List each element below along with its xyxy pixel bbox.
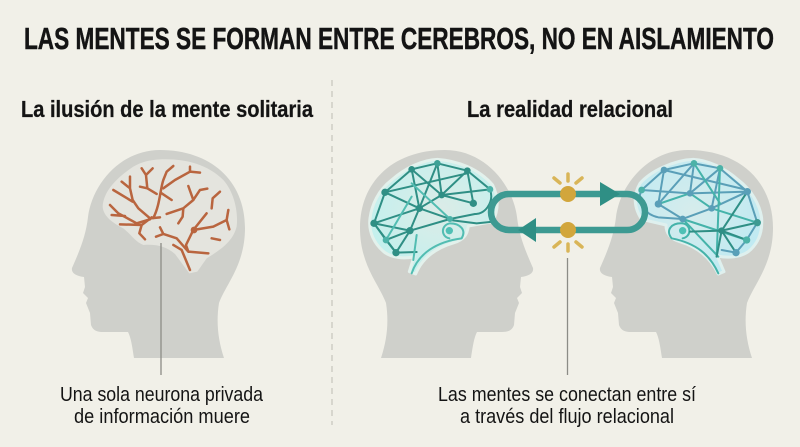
leader line: left: [160, 243, 162, 375]
caption: right: [438, 383, 696, 428]
icon: bottom spark node: [554, 222, 582, 251]
panel: relational reality: [360, 150, 773, 428]
panel: solitary mind: [60, 150, 264, 428]
caption: left: de información muere: [74, 405, 250, 428]
icon: top spark node: [554, 174, 582, 202]
heading: right panel: La realidad relacional: [467, 96, 673, 122]
icon: right connected brain: [635, 159, 762, 274]
heading: left panel: La ilusión de la mente solitaria: [21, 96, 314, 122]
caption: right: a través del flujo relacional: [460, 405, 674, 428]
icon: middle head silhouette: [360, 150, 533, 358]
caption: left: [60, 383, 264, 428]
leader line: right: [566, 258, 568, 375]
arrow: relational flow loop: [491, 182, 645, 242]
icon: right head silhouette: [600, 150, 773, 358]
caption: left: Una sola neurona privada: [60, 383, 264, 406]
icon: isolated brain with branching neuron: [103, 159, 237, 273]
caption: right: Las mentes se conectan entre sí: [438, 383, 696, 406]
icon: left connected brain: [370, 159, 497, 274]
icon: left head silhouette: [72, 150, 245, 358]
